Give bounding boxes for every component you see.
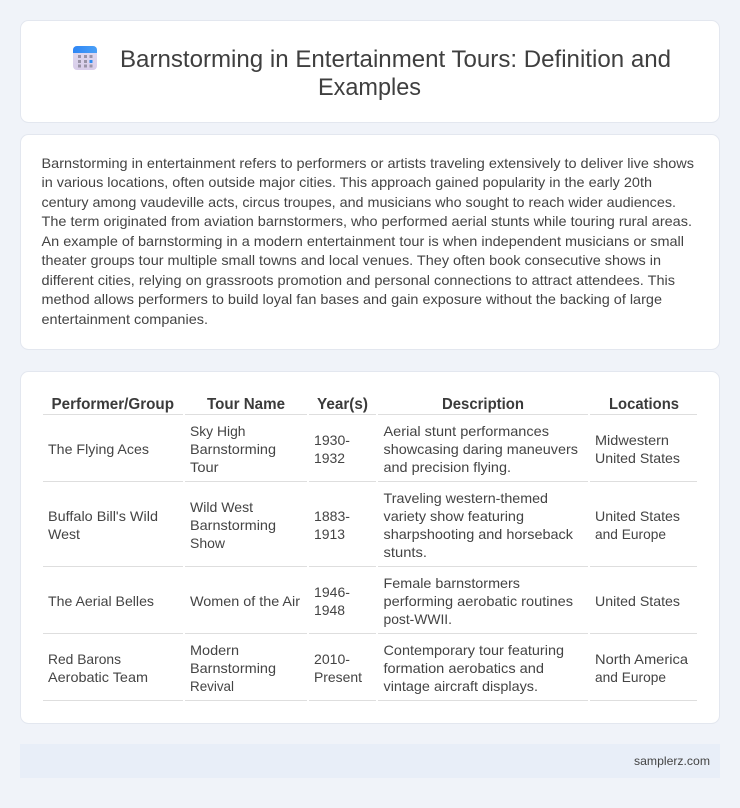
table row: The Aerial Belles: Women of the Air	[190, 593, 300, 609]
table row: Red Barons Aerobatic Team: North America	[595, 651, 688, 667]
table row: Buffalo Bill's Wild West: Wild West	[190, 499, 253, 515]
table row: Red Barons Aerobatic Team: Present	[314, 669, 362, 685]
table row: The Flying Aces: Barnstorming	[190, 441, 276, 457]
table row: The Aerial Belles: Female barnstormers	[384, 575, 520, 591]
table row: The Flying Aces: Midwestern	[595, 432, 669, 448]
text block: definition and history: different cities, relying on grassroots promotion and personal connections to attract attendees. This	[42, 272, 675, 288]
table header: Performer/Group	[52, 396, 174, 413]
table row: The Aerial Belles: 1948	[314, 602, 345, 618]
table row: Red Barons Aerobatic Team: vintage aircraft displays.	[384, 678, 538, 694]
table header	[52, 396, 679, 413]
table row: Buffalo Bill's Wild West: Barnstorming	[190, 517, 276, 533]
footer	[20, 744, 720, 778]
text block: definition and history: in various locations, often outside major cities. This approach gained popularity in the early 20th	[42, 174, 652, 190]
table row: Red Barons Aerobatic Team: Modern	[190, 642, 239, 658]
table row: Red Barons Aerobatic Team: 2010-	[314, 651, 350, 667]
title	[120, 46, 671, 101]
table row: The Aerial Belles: 1946-	[314, 584, 350, 600]
table row: Buffalo Bill's Wild West: and Europe	[595, 526, 666, 542]
table row: Red Barons Aerobatic Team: Red Barons	[48, 651, 121, 667]
table header: Description	[442, 396, 524, 413]
text block: definition and history: Barnstorming in entertainment refers to performers or artists traveling extensively to deliver live shows	[42, 155, 694, 171]
text block: definition and history: An example of barnstorming in a modern entertainment tour is when independent musicians or small	[42, 233, 684, 249]
table header: Year(s)	[317, 396, 368, 413]
table row: Red Barons Aerobatic Team: Aerobatic Team	[48, 669, 148, 685]
table row: Red Barons Aerobatic Team: formation aerobatics and	[384, 660, 544, 676]
table row: The Flying Aces: and precision flying.	[384, 459, 511, 475]
table row: The Aerial Belles: post-WWII.	[384, 611, 452, 627]
table row: The Aerial Belles: performing aerobatic routines	[384, 593, 573, 609]
table row: Buffalo Bill's Wild West: 1883-	[314, 508, 350, 524]
text block: definition and history: century among vaudeville acts, circus troupes, and musicians who sought to reach wider audiences.	[42, 194, 676, 210]
table row: The Aerial Belles	[48, 575, 680, 627]
table row: Red Barons Aerobatic Team: Barnstorming	[190, 660, 276, 676]
table row: Buffalo Bill's Wild West: Traveling western-themed	[384, 490, 548, 506]
table row: The Flying Aces	[48, 423, 680, 475]
table row: Buffalo Bill's Wild West: variety show featuring	[384, 508, 524, 524]
text block: definition and history: method allows performers to build loyal fan bases and gain exposure without the backing of large	[42, 291, 662, 307]
table row: The Flying Aces: 1930-	[314, 432, 350, 448]
table row: Red Barons Aerobatic Team: Revival	[190, 678, 234, 694]
table header: Tour Name	[207, 396, 285, 413]
table row: The Aerial Belles: The Aerial Belles	[48, 593, 154, 609]
footer: samplerz.com	[634, 754, 710, 768]
table row: The Flying Aces: showcasing daring maneuvers	[384, 441, 578, 457]
panel: introduction paragraph	[20, 134, 720, 350]
icon: calendar	[73, 46, 97, 70]
table header: Locations	[609, 396, 679, 413]
table row: Red Barons Aerobatic Team	[48, 642, 688, 694]
table row: The Flying Aces: The Flying Aces	[48, 441, 149, 457]
panel: title header	[20, 20, 720, 122]
table row: Buffalo Bill's Wild West: Buffalo Bill's Wild	[48, 508, 158, 524]
text block: definition and history: The term originated from aviation barnstormers, who performed aerial stunts while touring rural areas.	[42, 213, 692, 229]
table row: Buffalo Bill's Wild West: stunts.	[384, 544, 427, 560]
table row: The Flying Aces: Aerial stunt performances	[384, 423, 549, 439]
table row: Buffalo Bill's Wild West: West	[48, 526, 80, 542]
table row: Buffalo Bill's Wild West: sharpshooting and horseback	[384, 526, 574, 542]
text block: definition and history	[42, 155, 694, 327]
table row: The Aerial Belles: United States	[595, 593, 680, 609]
table row: Buffalo Bill's Wild West: Show	[190, 535, 226, 551]
table row: Red Barons Aerobatic Team: Contemporary tour featuring	[384, 642, 564, 658]
table row: The Flying Aces: 1932	[314, 450, 345, 466]
title: Examples	[318, 74, 421, 101]
panel: tours table	[20, 372, 720, 724]
table row: Buffalo Bill's Wild West	[48, 490, 680, 560]
table row: Buffalo Bill's Wild West: 1913	[314, 526, 345, 542]
table row: The Flying Aces: Tour	[190, 459, 219, 475]
title: Barnstorming in Entertainment Tours: Definition and	[120, 46, 671, 73]
text block: definition and history: entertainment companies.	[42, 311, 208, 327]
table row: The Flying Aces: Sky High	[190, 423, 246, 439]
table row: Red Barons Aerobatic Team: and Europe	[595, 669, 666, 685]
text block: definition and history: theater groups tour multiple small towns and local venues. They often book consecutive shows in	[42, 252, 661, 268]
table row: The Flying Aces: United States	[595, 450, 680, 466]
table row: Buffalo Bill's Wild West: United States	[595, 508, 680, 524]
